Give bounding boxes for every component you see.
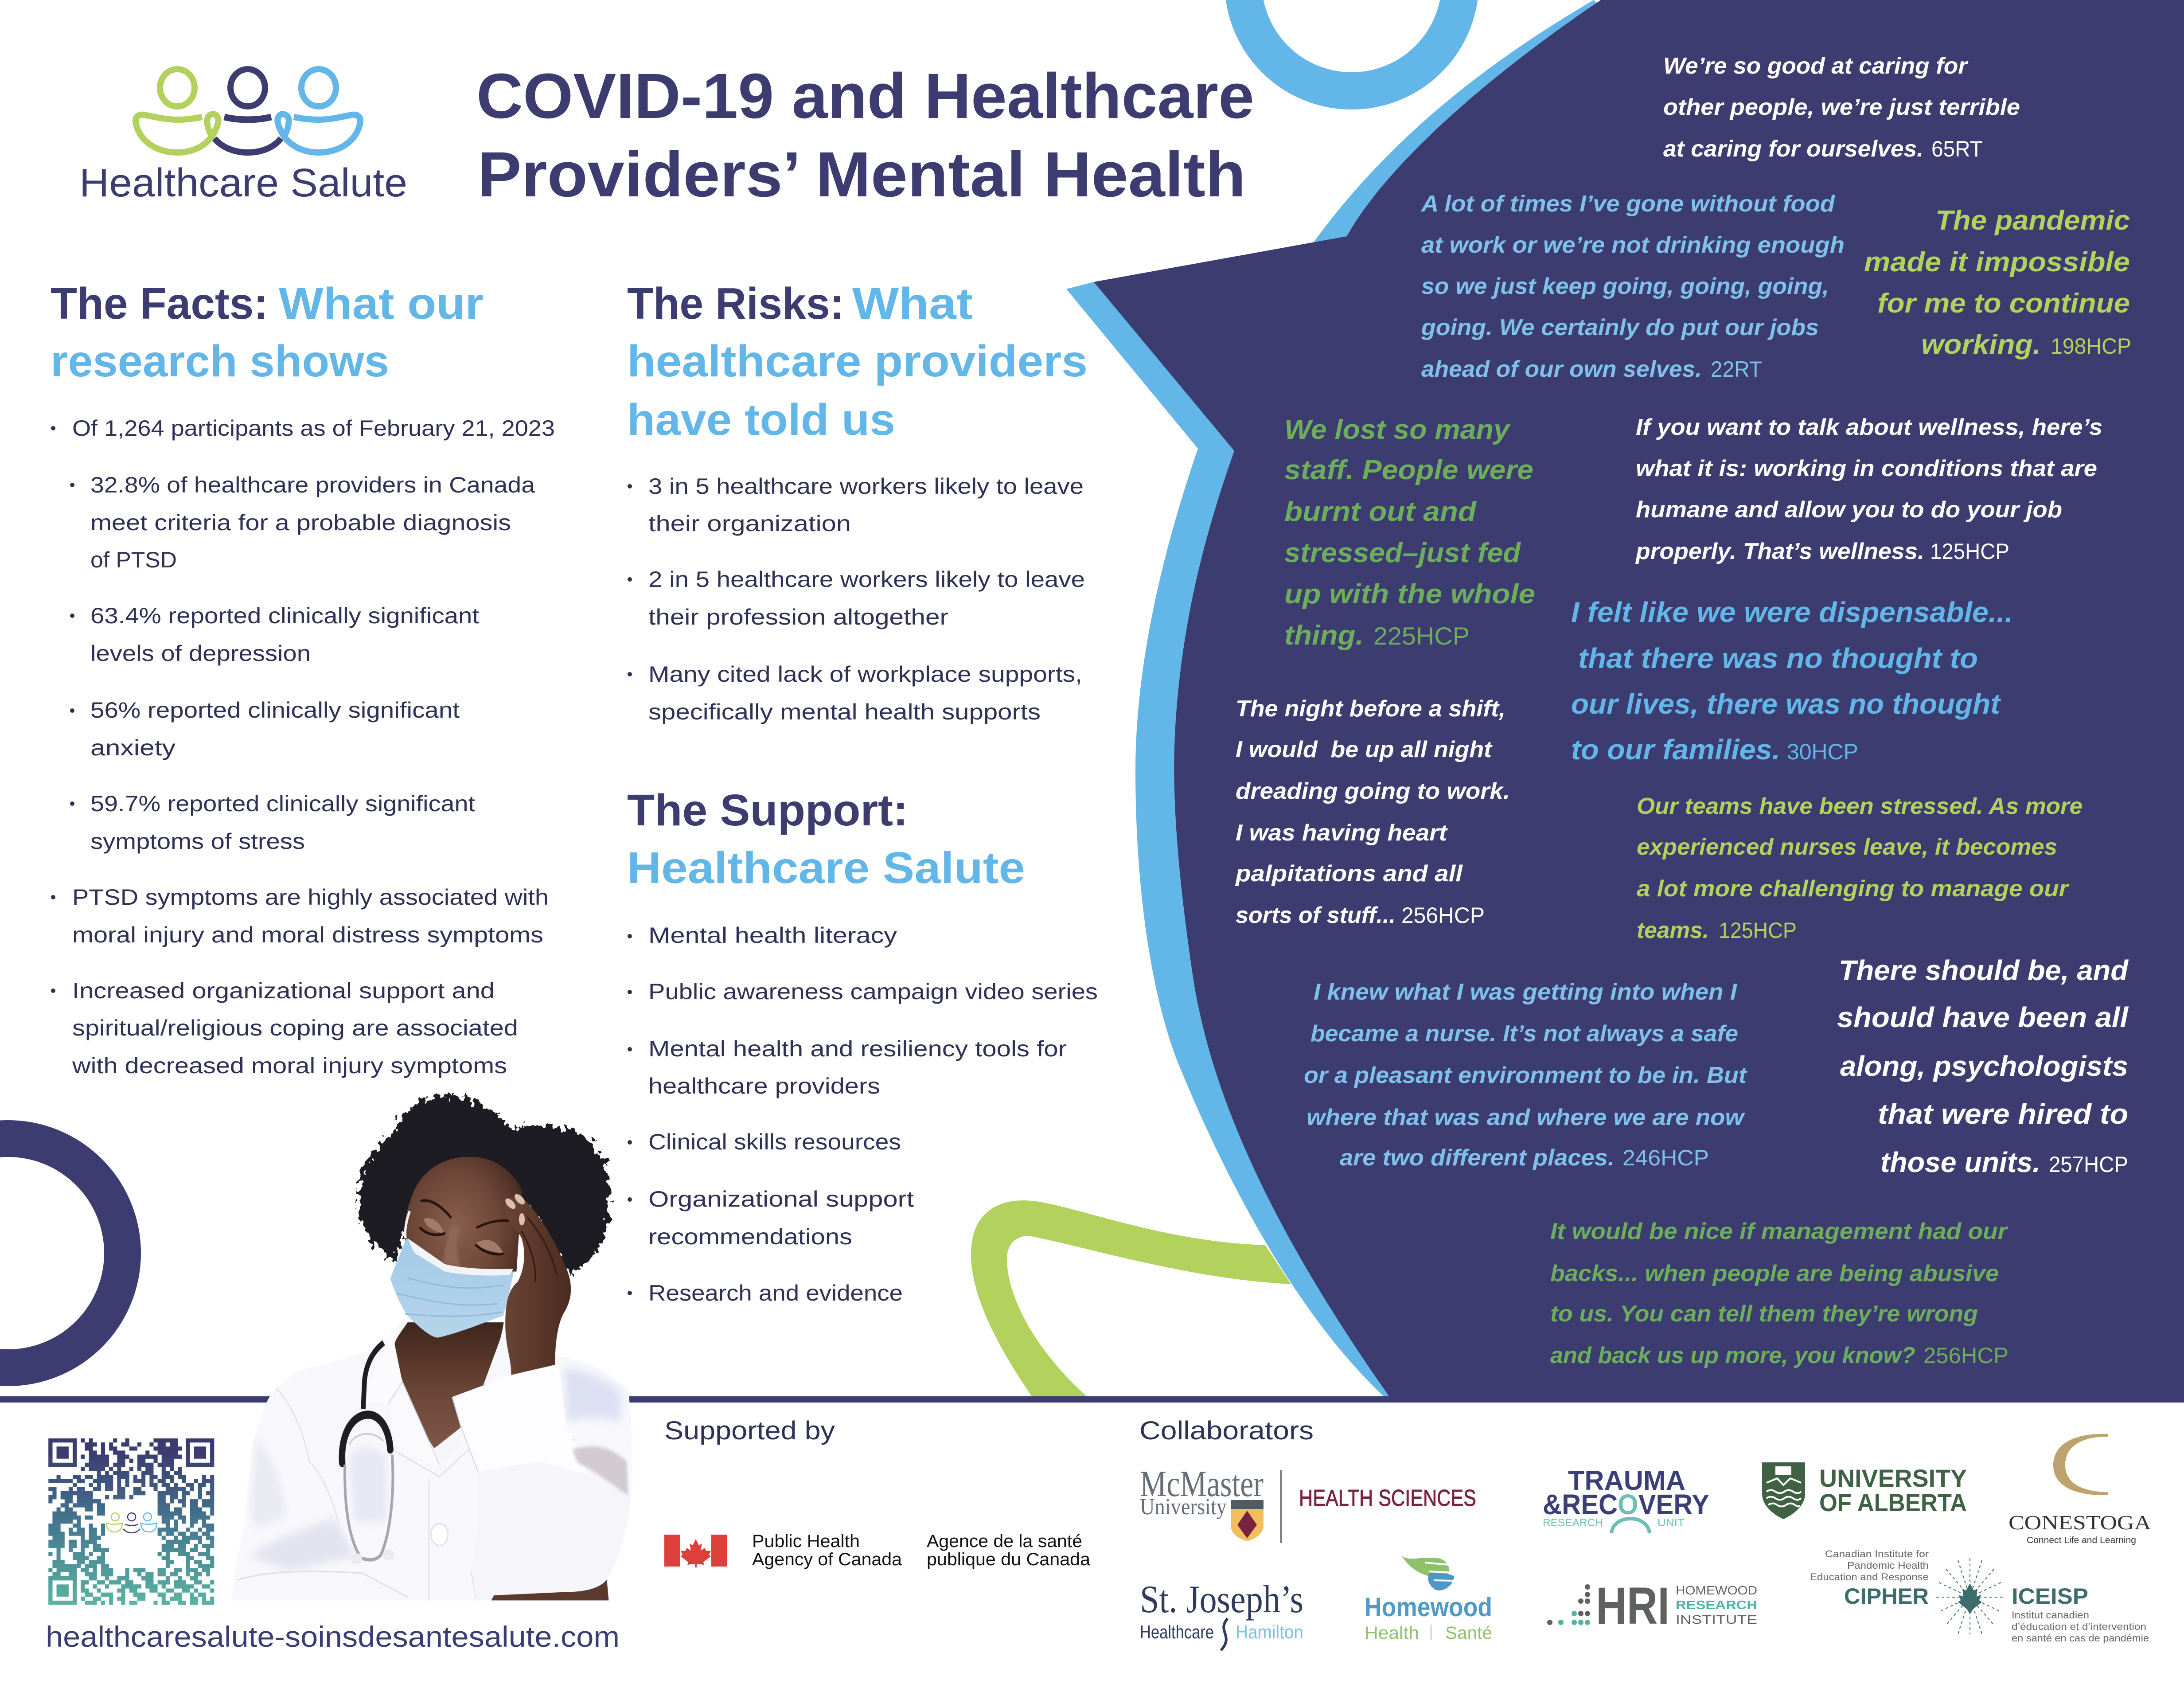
quote: psychologists xyxy=(1837,954,2129,1178)
quote: night before a shift: I would be up all night xyxy=(1236,737,1493,762)
face xyxy=(404,1157,522,1275)
heading: The Risks: have told us xyxy=(627,395,895,445)
quote: night before a shift: The night before a shift, xyxy=(1236,696,1505,722)
list: support: recommendations xyxy=(648,1224,852,1249)
quote: pandemic: 198HCP xyxy=(2051,334,2131,359)
list: facts: moral injury and moral distress symptoms xyxy=(72,922,543,947)
quote: management: to us. You can tell them they’re wrong xyxy=(1550,1301,1978,1327)
list: risks: 2 in 5 healthcare workers likely to leave xyxy=(648,567,1085,592)
quote: became a nurse xyxy=(1304,979,1748,1171)
hand xyxy=(504,1192,571,1375)
quote: without food: going. We certainly do put our jobs xyxy=(1421,315,1819,340)
quote: lost staff xyxy=(1284,414,1535,651)
quote: psychologists: should have been all xyxy=(1837,1001,2129,1033)
coat seams xyxy=(238,1388,575,1600)
logo: Homewood Health: Health xyxy=(1365,1623,1419,1643)
list: facts: spiritual/religious coping are associated xyxy=(72,1016,518,1040)
quote: lost staff: staff. People were xyxy=(1284,455,1533,485)
list: facts: levels of depression xyxy=(90,641,311,666)
panel: The Risks xyxy=(627,279,1088,724)
quote: management: 256HCP xyxy=(1923,1343,2008,1368)
eyebrows and eyes xyxy=(420,1200,511,1254)
decorative swoosh: green xyxy=(971,1200,1291,1396)
quote: pandemic: working. xyxy=(1921,329,2041,360)
list: facts: symptoms of stress xyxy=(90,829,305,854)
logo: Homewood Health: Homewood xyxy=(1365,1592,1492,1622)
logo: Trauma and Recovery Research Unit: &RECOVERY xyxy=(1543,1489,1709,1520)
quote: lost staff: burnt out and xyxy=(1284,496,1477,527)
quote: teams stressed: teams. xyxy=(1637,918,1709,943)
neck and chest xyxy=(394,1322,504,1449)
logo: CIPHER ICEISP: Education and Response xyxy=(1810,1571,1929,1582)
logo: Homewood Research Institute: HRI xyxy=(1596,1577,1669,1635)
quote: lost staff: stressed–just fed xyxy=(1284,538,1521,568)
logo: Healthcare Salute xyxy=(79,69,407,205)
QR code xyxy=(47,1437,215,1606)
logo: McMaster Health Sciences: HEALTH SCIENCES xyxy=(1299,1485,1476,1511)
quote: pandemic: The pandemic xyxy=(1935,205,2130,236)
quote: lost staff: up with the whole xyxy=(1284,579,1535,610)
logo: University of Alberta: UNIVERSITY xyxy=(1819,1464,1967,1492)
list: risks: their organization xyxy=(648,511,851,536)
panel: quotes background xyxy=(1094,0,2184,1403)
quote: teams stressed: 125HCP xyxy=(1719,918,1797,943)
quote: psychologists: There should be, and xyxy=(1839,954,2129,986)
quote: teams stressed xyxy=(1637,793,2083,943)
quote: lost staff: 225HCP xyxy=(1373,622,1470,650)
quote: management: and back us up more, you know? xyxy=(1550,1343,1915,1368)
logo: CIPHER ICEISP: ICEISP xyxy=(2012,1584,2088,1609)
quote: psychologists: 257HCP xyxy=(2049,1152,2128,1177)
arm at the bottom xyxy=(491,1579,608,1600)
sleeve cuff xyxy=(452,1366,588,1485)
hair xyxy=(359,1095,610,1277)
logo: Homewood Research Institute: INSTITUTE xyxy=(1676,1613,1757,1626)
list: facts: 32.8% of healthcare providers in Canada xyxy=(90,473,535,497)
logo: McMaster Health Sciences xyxy=(1140,1463,1476,1543)
quote: without food xyxy=(1420,191,1845,382)
quote: management: backs... when people are being abusive xyxy=(1550,1261,1999,1286)
quote: dispensable: to our families. xyxy=(1571,734,1780,766)
quote: psychologists: that were hired to xyxy=(1878,1098,2128,1130)
list: support: Mental health literacy xyxy=(648,923,897,948)
footer divider bar xyxy=(0,1396,2184,1403)
logo: Homewood Research Institute: HOMEWOOD xyxy=(1676,1583,1757,1597)
list: facts xyxy=(51,416,555,1078)
logo: Public Health Agency of Canada: publique du Canada xyxy=(927,1550,1091,1569)
decorative ring: top blue xyxy=(1243,0,1460,91)
title: Providers’ Mental Health xyxy=(477,139,1246,210)
title xyxy=(476,60,1254,210)
quote: dispensable: I felt like we were dispensable... xyxy=(1571,596,2013,628)
quote: wellness: properly. That’s wellness. xyxy=(1635,539,1924,564)
quote: night before a shift xyxy=(1235,696,1510,928)
quote: pandemic xyxy=(1864,205,2131,360)
list: risks: 3 in 5 healthcare workers likely to leave xyxy=(648,474,1084,499)
list: risks: their profession altogether xyxy=(648,605,948,629)
quote: without food: at work or we’re not drinking enough xyxy=(1421,232,1845,258)
logo: Homewood Health: Santé xyxy=(1445,1623,1492,1643)
heading: The Facts: What our xyxy=(279,279,484,328)
quote: caring for ourselves: at caring for ourselves. xyxy=(1663,136,1923,162)
mask xyxy=(390,1238,514,1338)
quote: without food: A lot of times I’ve gone without food xyxy=(1420,191,1835,217)
heading: The Facts xyxy=(51,279,484,386)
heading: Supported by: Supported by xyxy=(664,1416,835,1445)
logo: Conestoga xyxy=(2008,1434,2151,1545)
list: facts: 56% reported clinically significant xyxy=(90,698,460,723)
coat button xyxy=(431,1524,448,1546)
quote: became a nurse: where that was and where we are now xyxy=(1306,1105,1746,1130)
title: COVID-19 and Healthcare xyxy=(476,60,1254,132)
quote: became a nurse: 246HCP xyxy=(1622,1145,1709,1170)
heading: The Support: The Support: xyxy=(627,785,908,835)
heading: The Risks xyxy=(627,279,1088,445)
list: facts: of PTSD xyxy=(90,547,177,572)
quote: became a nurse: are two different places. xyxy=(1340,1145,1615,1171)
list: support: healthcare providers xyxy=(648,1074,880,1098)
quote: dispensable: our lives, there was no thought xyxy=(1571,688,2001,720)
logo: McMaster Health Sciences: University xyxy=(1140,1494,1227,1520)
list: facts: anxiety xyxy=(90,735,176,760)
logo: University of Alberta: OF ALBERTA xyxy=(1819,1489,1967,1516)
quote: became a nurse: became a nurse. It’s not always a safe xyxy=(1310,1021,1738,1047)
quote: without food: so we just keep going, going, going, xyxy=(1421,274,1829,299)
list: facts: 63.4% reported clinically significant xyxy=(90,603,479,628)
list: support: Clinical skills resources xyxy=(648,1129,901,1154)
list: risks xyxy=(628,474,1085,724)
quote: dispensable xyxy=(1571,596,2013,766)
heading: The Facts: The Facts: xyxy=(51,279,268,328)
quote: without food: ahead of our own selves. xyxy=(1421,356,1702,382)
quote: night before a shift: palpitations and all xyxy=(1235,861,1463,887)
logo: Public Health Agency of Canada: Agency of Canada xyxy=(752,1550,902,1569)
logo: CIPHER ICEISP: Pandemic Health xyxy=(1847,1560,1929,1571)
heading: The Support xyxy=(627,785,1025,893)
quote: management xyxy=(1550,1219,2008,1368)
website URL: healthcaresalute-soinsdesantesalute.com xyxy=(46,1620,620,1653)
quote: became a nurse: I knew what I was getting into when I xyxy=(1314,979,1738,1005)
quote: night before a shift: I was having heart xyxy=(1236,820,1448,846)
quote: night before a shift: dreading going to work. xyxy=(1236,778,1510,804)
quote: wellness: If you want to talk about wellness, here’s xyxy=(1636,414,2102,440)
stethoscope xyxy=(342,1343,393,1560)
heading: The Risks: healthcare providers xyxy=(627,336,1088,386)
quote: teams stressed: Our teams have been stressed. As more xyxy=(1637,793,2083,819)
list: facts: meet criteria for a probable diagnosis xyxy=(90,510,511,535)
logo: CIPHER ICEISP: CIPHER xyxy=(1844,1584,1929,1609)
heading: The Support: Healthcare Salute xyxy=(627,843,1025,893)
decorative ring: left navy xyxy=(0,1138,122,1368)
logo: McMaster Health Sciences: McMaster xyxy=(1140,1463,1264,1504)
logo: Conestoga: Connect Life and Learning xyxy=(2027,1536,2136,1545)
quote: wellness: 125HCP xyxy=(1930,539,2009,564)
quote: caring for ourselves xyxy=(1663,53,2020,162)
list: facts: Increased organizational support and xyxy=(72,978,495,1003)
quote: psychologists: along, psychologists xyxy=(1840,1050,2128,1082)
quote: became a nurse: or a pleasant environment to be in. But xyxy=(1304,1063,1748,1088)
list: facts: Of 1,264 participants as of February 21, 2023 xyxy=(72,416,555,441)
quote: dispensable: 30HCP xyxy=(1787,739,1858,764)
quote: wellness: what it is: working in conditions that are xyxy=(1636,456,2097,481)
quote: without food: 22RT xyxy=(1711,357,1762,382)
heading: The Risks: The Risks: xyxy=(627,279,844,328)
logo: Homewood Health xyxy=(1365,1553,1492,1643)
quote: wellness xyxy=(1635,414,2102,564)
quote: night before a shift: sorts of stuff... xyxy=(1236,903,1396,928)
list: facts: with decreased moral injury symptoms xyxy=(72,1053,507,1078)
heading: The Risks: What xyxy=(852,279,973,328)
list: support: Organizational support xyxy=(648,1187,914,1211)
panel: The Facts xyxy=(51,279,555,1078)
photo: healthcare worker with mask xyxy=(232,1095,632,1600)
logo: CIPHER ICEISP: d’éducation et d’intervention xyxy=(2012,1621,2146,1632)
list: support: Public awareness campaign video series xyxy=(648,979,1098,1004)
logo: Trauma and Recovery Research Unit: RESEARCH xyxy=(1543,1517,1603,1529)
quote: teams stressed: a lot more challenging to manage our xyxy=(1637,876,2070,902)
collar xyxy=(363,1317,406,1404)
logo: Public Health Agency of Canada: Public Health xyxy=(752,1532,860,1551)
logo: CIPHER ICEISP: Canadian Institute for xyxy=(1825,1548,1929,1559)
logo: CIPHER ICEISP: Institut canadien xyxy=(2012,1610,2089,1621)
list: facts: 59.7% reported clinically significant xyxy=(90,791,475,816)
logo: St. Joseph's Healthcare Hamilton: St. Joseph’s xyxy=(1140,1578,1303,1621)
quote: dispensable: that there was no thought to xyxy=(1578,642,1978,674)
quote: pandemic: made it impossible xyxy=(1864,247,2130,277)
coat shadows xyxy=(248,1368,621,1573)
list: risks: Many cited lack of workplace supports, xyxy=(648,662,1082,687)
quote: wellness: humane and allow you to do your job xyxy=(1636,497,2062,523)
undershirt xyxy=(433,1438,462,1466)
logo: St. Joseph's Healthcare Hamilton xyxy=(1140,1578,1303,1650)
panel: Collaborators xyxy=(1139,1416,2151,1650)
logo: St. Joseph's Healthcare Hamilton: Hamilton xyxy=(1236,1622,1303,1642)
quote: caring for ourselves: other people, we’re just terrible xyxy=(1663,94,2020,120)
coat xyxy=(232,1317,632,1600)
quote: teams stressed: experienced nurses leave, it becomes xyxy=(1637,834,2057,860)
quote: night before a shift: 256HCP xyxy=(1401,903,1485,928)
quote: lost staff: thing. xyxy=(1284,620,1364,651)
quote: psychologists: those units. xyxy=(1880,1146,2040,1178)
quote: pandemic: for me to continue xyxy=(1877,288,2130,319)
list: support: Research and evidence xyxy=(648,1281,903,1305)
logo: CIPHER ICEISP: en santé en cas de pandémie xyxy=(2012,1633,2149,1644)
quote: management: It would be nice if management had our xyxy=(1550,1219,2008,1244)
quote: lost staff: We lost so many xyxy=(1284,414,1511,445)
heading: Collaborators: Collaborators xyxy=(1139,1416,1314,1445)
list: support: Mental health and resiliency tools for xyxy=(648,1036,1067,1061)
panel: Supported by xyxy=(664,1416,1091,1569)
logo: Healthcare Salute: Healthcare Salute xyxy=(79,161,407,205)
logo: Homewood Research Institute xyxy=(1547,1577,1757,1635)
logo: Trauma and Recovery Research Unit xyxy=(1543,1465,1709,1533)
logo: CIPHER ICEISP xyxy=(1810,1548,2149,1644)
logo: Trauma and Recovery Research Unit: TRAUMA xyxy=(1568,1465,1685,1496)
quote: caring for ourselves: We’re so good at caring for xyxy=(1663,53,1969,79)
list: facts: PTSD symptoms are highly associated with xyxy=(72,885,549,910)
logo: St. Joseph's Healthcare Hamilton: Healthcare xyxy=(1140,1622,1214,1642)
logo: University of Alberta xyxy=(1762,1462,1967,1519)
logo: Public Health Agency of Canada xyxy=(664,1532,1091,1569)
ear loop xyxy=(405,1211,410,1238)
list: support xyxy=(628,923,1098,1305)
logo: Homewood Research Institute: RESEARCH xyxy=(1676,1598,1757,1612)
decorative swoosh: blue edge of quote panel xyxy=(1066,0,1640,1396)
list: risks: specifically mental health supports xyxy=(648,699,1041,724)
QR centre logo xyxy=(106,1513,157,1533)
logo: Public Health Agency of Canada: Agence de la santé xyxy=(927,1532,1082,1551)
logo: Conestoga: CONESTOGA xyxy=(2008,1511,2151,1534)
logo: Trauma and Recovery Research Unit: UNIT xyxy=(1658,1517,1685,1529)
quote: caring for ourselves: 65RT xyxy=(1931,137,1983,161)
heading: The Facts: research shows xyxy=(51,336,389,386)
panel: The Support xyxy=(627,785,1098,1305)
